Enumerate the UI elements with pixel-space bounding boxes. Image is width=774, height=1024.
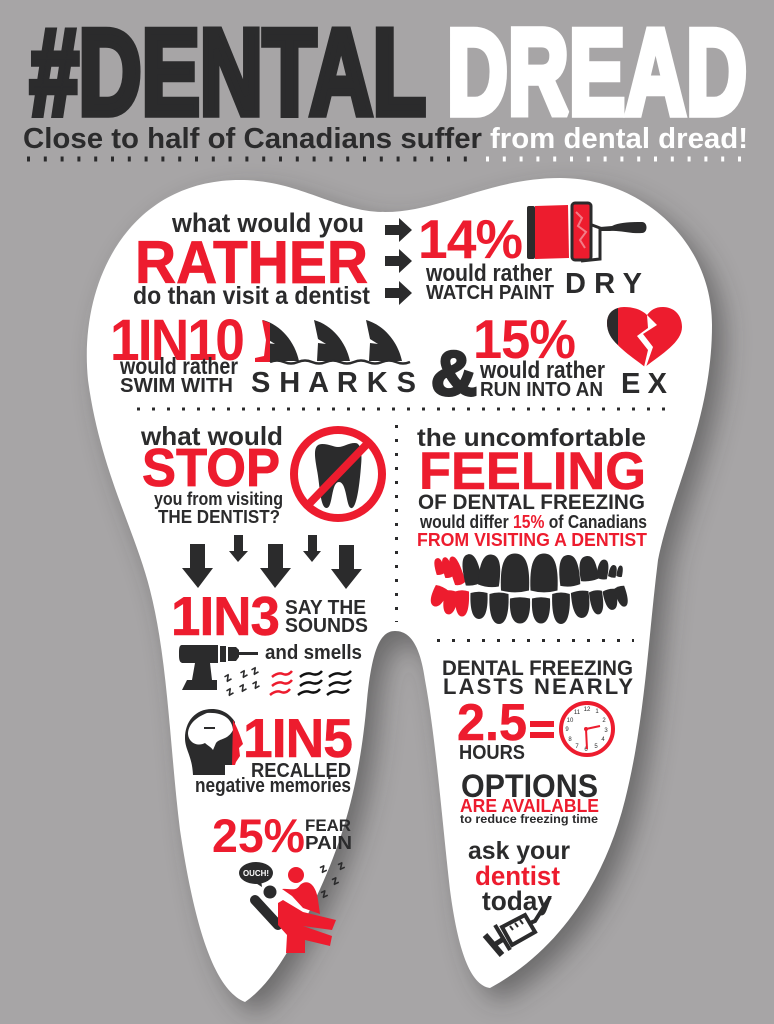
icon: broken heart: [607, 307, 682, 367]
title: #DENTAL: [30, 4, 426, 140]
duration text: LASTS NEARLY: [443, 674, 633, 699]
feeling heading: would differ 15% of Canadians: [419, 512, 647, 532]
options text: [460, 768, 599, 826]
stat: 14% paint: [418, 208, 642, 304]
stat: 1 in 10 sharks: SWIM WITH: [120, 375, 233, 397]
icon: syringe: [485, 897, 550, 955]
icon: patient in chair: [239, 862, 336, 953]
stat: 1 in 10 sharks: 1IN10: [110, 308, 243, 373]
stat: 1 in 10 sharks: S H A R K S: [251, 367, 416, 399]
icon: teeth: [427, 553, 630, 624]
stat: 1 in 3: SOUNDS: [285, 615, 368, 637]
stat: 14% paint: would rather: [425, 260, 552, 287]
duration text: 2.5: [457, 694, 527, 752]
options text: ARE AVAILABLE: [460, 796, 599, 816]
panel: rather: [110, 203, 682, 409]
stat: 1 in 5: 1IN5: [243, 707, 352, 769]
stat: 1 in 3: SAY THE: [285, 597, 366, 619]
icon: clock: 12: [584, 707, 591, 713]
stat: 1 in 10 sharks: [110, 308, 416, 399]
call to action: dentist: [475, 861, 560, 891]
stat: 1 in 5: negative memories: [195, 775, 351, 797]
subtitle: from dental dread!: [490, 123, 748, 155]
call to action: today: [482, 886, 552, 916]
icon: clock: 6: [584, 747, 588, 753]
stat: 25% fear pain: [212, 809, 352, 862]
icon: clock: 4: [601, 737, 605, 743]
duration text: DENTAL FREEZING: [442, 657, 633, 680]
icon: sleeping z: Z: [320, 888, 329, 900]
icon: clock: 2: [602, 718, 606, 724]
feeling heading: FEELING: [419, 442, 646, 501]
stat: 25% fear pain: FEAR: [305, 816, 351, 835]
icon: smell waves: [270, 671, 351, 695]
stat: 15% ex: would rather: [479, 357, 605, 384]
duration text: HOURS: [459, 742, 525, 764]
icon: clock: 1: [595, 709, 599, 715]
equals sign: [530, 721, 554, 738]
icon: no tooth: [294, 430, 382, 518]
icon: paint roller: [527, 203, 646, 261]
stat: 14% paint: 14%: [418, 208, 522, 270]
subtitle: Close to half of Canadians suffer: [23, 123, 482, 155]
stat: 1 in 10 sharks: would rather: [119, 353, 238, 379]
call to action: [468, 837, 570, 916]
stop heading: THE DENTIST?: [158, 507, 280, 527]
feeling heading: OF DENTAL FREEZING: [418, 491, 645, 514]
stop heading: what would: [140, 421, 283, 451]
icon: sleeping z: Z: [337, 860, 346, 872]
icon: clock: 7: [575, 744, 579, 750]
icon: z z z: [223, 665, 261, 698]
stat: 1 in 5: [195, 707, 352, 797]
icon: drill: [179, 645, 258, 690]
icon: head with brain: [185, 709, 243, 775]
icon: clock: 5: [594, 744, 598, 750]
ampersand: &: [431, 339, 477, 409]
feeling heading: the uncomfortable: [417, 424, 646, 452]
stat: 1 in 3: and smells: [265, 642, 362, 664]
stat: 15% ex: [473, 308, 668, 401]
icon: z z z: Z: [251, 679, 261, 691]
panel: freezing duration: [442, 657, 633, 955]
arrows: [385, 218, 412, 305]
stat: 15% ex: 15%: [473, 308, 575, 370]
upper teeth: [433, 553, 624, 592]
options text: OPTIONS: [461, 768, 598, 804]
feeling heading: [417, 424, 647, 550]
tooth shape: [87, 178, 712, 1002]
icon: sleeping z: Z: [331, 875, 340, 887]
duration text: [442, 657, 633, 764]
icon: clock: 9: [565, 727, 569, 733]
stat: 1 in 5: RECALLED: [251, 760, 351, 782]
stat: 14% paint: D R Y: [565, 268, 642, 300]
icon: z z z: Z: [225, 686, 235, 698]
icon: sleeping z: Z: [319, 863, 328, 875]
icon: patient in chair: OUCH!: [243, 869, 269, 878]
stat: 1 in 3: [171, 585, 368, 664]
icon: clock: 8: [568, 737, 572, 743]
icon: clock: 3: [604, 728, 608, 734]
subtitle: [23, 123, 748, 155]
options text: to reduce freezing time: [460, 812, 598, 826]
stop heading: STOP: [142, 438, 280, 498]
stat: 15% ex: E X: [621, 368, 668, 400]
rather heading: [133, 208, 371, 310]
feeling heading: FROM VISITING A DENTIST: [417, 530, 647, 550]
stat: 15% ex: RUN INTO AN: [480, 379, 603, 401]
rather heading: do than visit a dentist: [133, 282, 371, 310]
icon: z z z: Z: [238, 682, 248, 694]
icon: clock: 11: [574, 710, 581, 716]
icon: sleeping z: [319, 860, 346, 900]
stat: 25% fear pain: 25%: [212, 809, 305, 862]
stat: 14% paint: WATCH PAINT: [426, 282, 554, 304]
stop heading: [140, 421, 283, 527]
icon: z z z: Z: [250, 665, 260, 677]
icon: shark fins: [255, 320, 410, 364]
rather heading: RATHER: [135, 229, 368, 296]
icon: z z z: Z: [223, 672, 233, 684]
stat: 25% fear pain: PAIN: [305, 833, 352, 853]
icon: z z z: Z: [239, 668, 249, 680]
arrows down: [182, 535, 362, 589]
icon: clock: [561, 703, 613, 755]
stop heading: you from visiting: [154, 489, 283, 509]
rather heading: what would you: [171, 208, 364, 238]
stat: 1 in 3: 1IN3: [171, 585, 279, 647]
panel: stop: [140, 421, 382, 953]
icon: clock: 10: [567, 718, 574, 724]
call to action: ask your: [468, 837, 570, 865]
panel: feeling: [417, 424, 647, 624]
lower teeth: [427, 584, 630, 624]
